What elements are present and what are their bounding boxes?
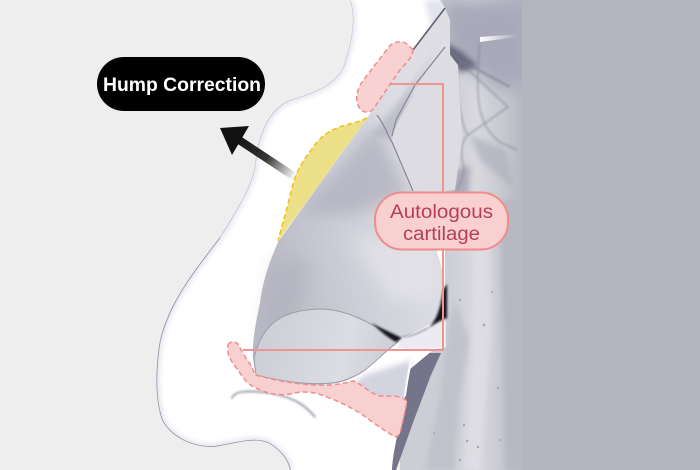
nose shading	[156, 0, 445, 470]
nostril shadow	[390, 353, 441, 470]
arrow	[220, 126, 295, 177]
dorsal cartilage panel	[392, 48, 462, 191]
label: Autologous cartilage: Autologous	[390, 202, 493, 223]
face skin	[400, 0, 530, 470]
nose white silhouette	[156, 0, 445, 470]
nostril line	[232, 391, 315, 417]
label: Autologous cartilage: cartilage	[403, 224, 480, 245]
nose edge dark line	[413, 8, 445, 50]
white tab	[397, 317, 445, 351]
pink bracket line	[243, 84, 443, 350]
label: Hump Correction	[97, 57, 265, 111]
upper cartilage	[253, 8, 450, 385]
right grey panel	[518, 0, 700, 470]
label: Autologous cartilage	[375, 192, 508, 250]
facial contour lines	[430, 37, 517, 190]
lower lobule cartilage	[254, 309, 400, 384]
dark fold	[372, 284, 447, 342]
label: Hump Correction: Hump Correction	[103, 75, 261, 96]
top pink cartilage graft	[357, 42, 413, 112]
right white edge	[405, 352, 418, 396]
bright tab	[480, 34, 518, 42]
cartilage soft shading	[262, 45, 440, 340]
cartilage contour lines	[377, 47, 445, 191]
yellow dashed outline	[278, 118, 367, 241]
skin pores	[433, 291, 501, 461]
yellow hump area	[278, 118, 367, 241]
lower pink cartilage graft	[228, 342, 407, 437]
